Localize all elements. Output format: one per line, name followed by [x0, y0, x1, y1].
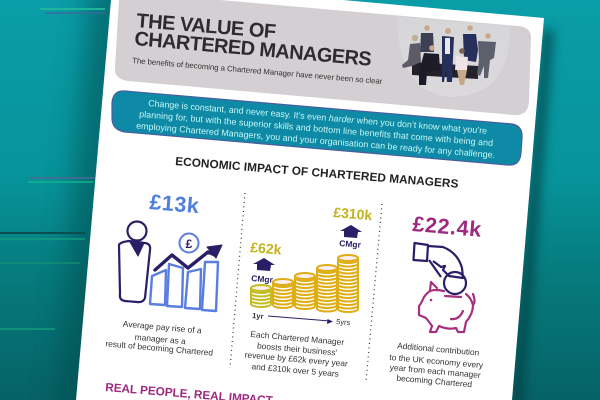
team photo — [397, 17, 510, 97]
panel: intro callout — [112, 91, 522, 165]
page shadow left — [60, 0, 125, 400]
caption: revenue by £62k every year — [244, 350, 348, 369]
icon: pound sign: £ — [186, 237, 193, 251]
caption: Additional contribution — [397, 340, 480, 358]
icon: piggy bank — [419, 282, 474, 332]
timeline arrow — [252, 311, 351, 327]
caption — [244, 329, 348, 379]
caption — [105, 319, 214, 358]
timeline arrow: 5yrs — [336, 317, 351, 327]
section heading: ECONOMIC IMPACT OF CHARTERED MANAGERS — [175, 154, 459, 191]
heads — [412, 25, 491, 54]
intro text: planning for, but with the superior skills and bottom line benefits that come with being and — [139, 109, 494, 148]
caption: Each Chartered Manager — [250, 329, 345, 347]
panel: economy contribution — [389, 212, 484, 389]
caption: to the UK economy every — [389, 352, 484, 370]
stat: 62k: £62k — [250, 239, 282, 258]
subtitle: The benefits of becoming a Chartered Manager have never been so clear — [132, 56, 383, 86]
page shadow right — [512, 30, 552, 400]
timeline arrow: 1yr — [252, 311, 264, 321]
stat: 310k: £310k — [333, 204, 373, 223]
stat: 22.4k: £22.4k — [412, 212, 483, 242]
title: THE VALUE OF — [136, 10, 277, 43]
icon: manager and rising chart — [119, 222, 222, 311]
icon: CMgr house large — [340, 225, 362, 238]
label: CMgr: CMgr — [251, 273, 274, 285]
icon: CMgr house small — [253, 258, 275, 271]
icon: hand with coin — [414, 243, 466, 294]
caption: and £310k over 5 years — [251, 361, 339, 379]
caption: result of becoming Chartered — [105, 338, 214, 358]
background streaks — [0, 8, 105, 330]
panel: pay rise — [105, 190, 222, 358]
icon: coin stacks — [251, 255, 358, 312]
caption: becoming Chartered — [396, 373, 473, 389]
intro text — [136, 98, 495, 160]
title: CHARTERED MANAGERS — [134, 28, 373, 71]
caption — [389, 340, 484, 389]
seated people — [419, 53, 440, 85]
standing people — [402, 43, 421, 68]
caption: year from each manager — [389, 362, 481, 380]
intro text: Change is constant, and never easy. It’s even harder when you don’t know what you’re — [148, 98, 488, 136]
panel: business revenue: CMgr — [339, 238, 362, 250]
intro text: employing Chartered Managers, you and your organisation can be ready for any challenge. — [136, 121, 495, 160]
panel: header — [115, 0, 531, 115]
caption: manager as a — [134, 332, 187, 346]
caption: Average pay rise of a — [122, 319, 202, 335]
paper page — [76, 0, 544, 400]
column dividers — [230, 193, 382, 382]
stat: 13k: £13k — [149, 190, 200, 218]
panel: business revenue — [244, 204, 373, 379]
caption: boosts their business’ — [257, 341, 338, 358]
sofa — [412, 62, 478, 79]
